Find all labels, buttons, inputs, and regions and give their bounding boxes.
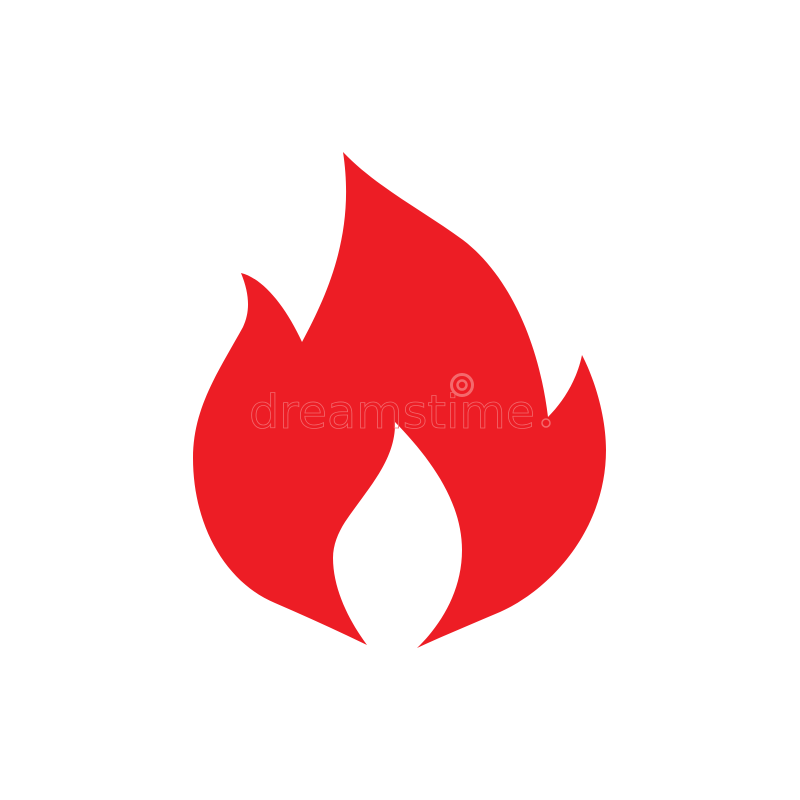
watermark text: dreamstime	[249, 385, 535, 439]
flame body	[193, 152, 606, 648]
